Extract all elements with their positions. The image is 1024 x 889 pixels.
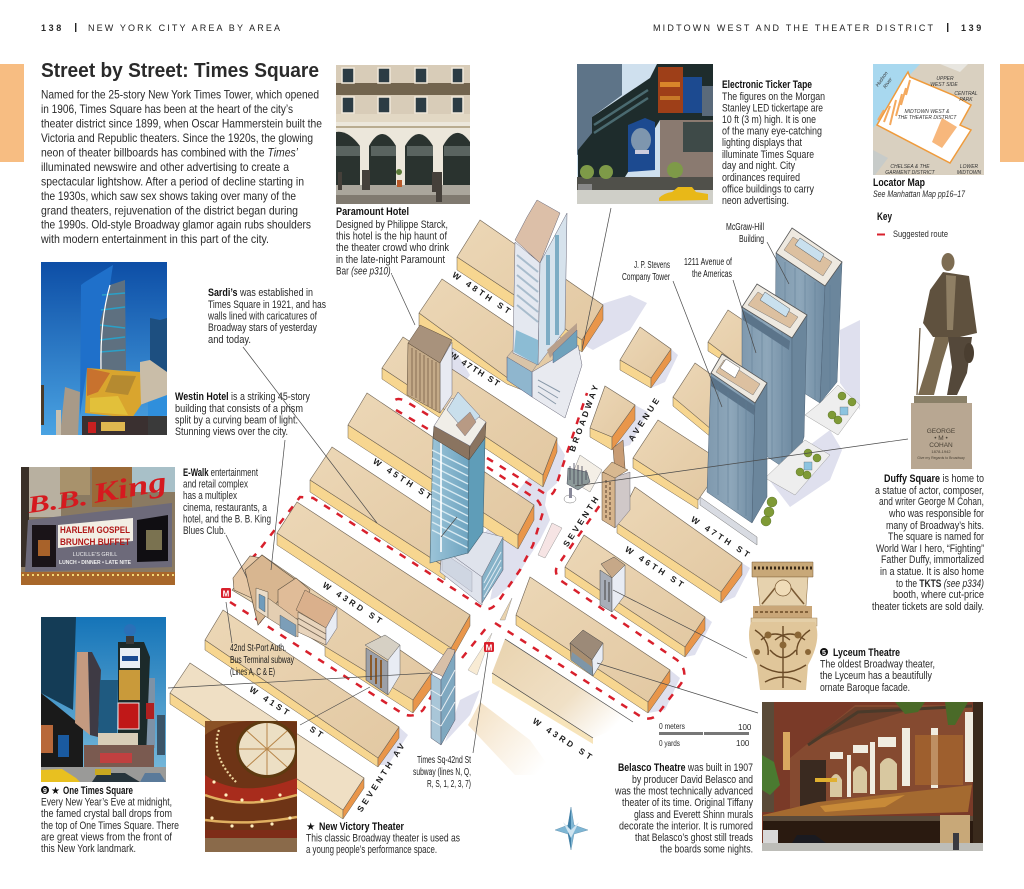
caption: Lyceum Theatre	[820, 647, 935, 694]
building labels: 1211 Avenue of	[684, 257, 732, 268]
caption: Duffy Square: to the TKTS (see p334)	[896, 578, 984, 590]
intro text block: Victoria and Republic theaters. Since the 1920s, the glowing	[41, 131, 313, 145]
caption: New Victory Theater: a young people’s performance space.	[306, 844, 437, 856]
block: W 45th lower	[516, 577, 670, 713]
illustrated street map	[168, 200, 908, 850]
block: Broadway small	[590, 386, 635, 450]
caption: Electronic Ticker Tape	[722, 79, 825, 207]
caption: Paramount Hotel: this hotel is the hip haunt of	[336, 230, 447, 242]
caption: Paramount Hotel	[336, 206, 450, 278]
caption: Electronic Ticker Tape: ordinances required	[722, 172, 800, 184]
building labels: Company Tower	[622, 272, 670, 283]
building labels: Building	[739, 234, 764, 245]
photo: New Victory Theater	[205, 721, 297, 852]
caption: Westin Hotel: building that consists of a prism	[175, 403, 303, 415]
statue figure	[917, 253, 977, 395]
caption: Duffy Square: who was responsible for	[888, 508, 984, 520]
caption: Belasco Theatre: was the most technically advanced	[614, 786, 753, 798]
locator map: CHELSEA & THE	[890, 164, 930, 170]
compass rose	[555, 807, 588, 850]
building labels: 42nd St-Port Auth.	[230, 643, 286, 654]
street labels: W 46TH ST	[623, 544, 688, 591]
locator map: PARK	[959, 97, 973, 103]
locator map: THE THEATER DISTRICT	[898, 115, 957, 121]
suggested route dashes	[230, 393, 684, 719]
street labels: W 47TH ST	[689, 514, 754, 561]
caption: Duffy Square: a statue of actor, composer,	[875, 485, 984, 497]
key legend	[877, 211, 948, 239]
photo: B.B. King marquee: HARLEM GOSPEL	[60, 525, 130, 536]
caption: Electronic Ticker Tape: office buildings to carry	[722, 184, 815, 196]
photo: B.B. King marquee: BRUNCH BUFFET	[60, 537, 130, 548]
photo: B.B. King marquee: LUNCH • DINNER • LATE NITE	[59, 560, 131, 566]
block: W 41st-42nd	[205, 610, 399, 767]
McGraw-Hill plaza and trees	[805, 385, 860, 435]
caption: Sardi's: Broadway stars of yesterday	[208, 322, 318, 334]
scale bar	[659, 722, 752, 748]
intro text block: neon of theater billboards has combined with the Times’	[41, 146, 298, 160]
caption: Electronic Ticker Tape: neon advertising.	[722, 195, 789, 207]
1211 plaza and trees	[765, 440, 830, 495]
intro text block: with modern entertainment in this part of the city.	[40, 232, 269, 246]
street labels: W 43RD ST	[321, 580, 386, 627]
caption: Electronic Ticker Tape: Electronic Ticker Tape	[722, 79, 812, 91]
caption: E-Walk: cinema, restaurants, a	[183, 502, 267, 514]
block: W 42nd-43rd	[232, 555, 432, 713]
locator map: UPPER	[936, 76, 954, 82]
subway icon: Times Sq	[484, 642, 494, 652]
block: W 46th St	[565, 535, 705, 657]
building labels: subway (lines N, Q,	[413, 767, 471, 778]
caption: Duffy Square: World War I hero, “Fighting”	[876, 543, 984, 555]
block: W 46th-47th	[382, 337, 557, 487]
caption: Belasco Theatre: that Belasco’s ghost still treads	[635, 832, 753, 844]
block: W 44th-45th	[310, 447, 480, 580]
caption: Sardi's: Times Square in 1921, and has	[208, 299, 326, 311]
caption: Belasco Theatre: theater of its time. Original Tiffany	[622, 797, 754, 809]
caption: Sardi's: and today.	[208, 334, 251, 346]
caption: Westin Hotel: split by a curving beam of light.	[175, 414, 298, 426]
right thumb tab	[1000, 64, 1024, 162]
Morgan Stanley tower	[507, 200, 582, 418]
block: Avenue small	[620, 327, 671, 388]
block: W 43rd lower fading	[492, 639, 633, 744]
caption: One Times Square: this New York landmark.	[41, 843, 136, 855]
block: W 48th St north	[457, 220, 603, 352]
caption: One Times Square: the famed crystal ball drops from	[41, 808, 172, 820]
caption: Duffy Square	[872, 473, 984, 613]
caption: Lyceum Theatre: 5	[822, 650, 826, 657]
1211 Avenue of the Americas tower	[742, 284, 807, 473]
Duffy Square TKTS booth	[564, 455, 602, 503]
Duffy Square tall building	[602, 440, 630, 528]
caption: Belasco Theatre	[614, 762, 754, 856]
locator map caption: See Manhattan Map pp16–17	[873, 189, 966, 200]
caption: Westin Hotel: Westin Hotel is a striking 45-story	[175, 391, 311, 403]
street labels: W 45TH ST	[371, 456, 436, 503]
caption: One Times Square: Every New Year’s Eve at midnight,	[41, 796, 172, 808]
caption: Westin Hotel: Stunning views over the city.	[175, 426, 288, 438]
block: lower fading	[468, 702, 555, 775]
caption: Electronic Ticker Tape: The figures on the Morgan	[722, 91, 825, 103]
traffic islands	[468, 523, 562, 675]
photo: Lyceum Theatre	[762, 702, 983, 851]
caption: Paramount Hotel: Designed by Philippe Starck,	[336, 219, 448, 231]
street labels: ST	[308, 724, 327, 741]
subway icon: Times Sq: M	[486, 643, 493, 652]
caption: Belasco Theatre: glass and Everett Shinn murals	[634, 809, 753, 821]
building labels: (Lines A, C & E)	[230, 667, 275, 678]
caption: Belasco Theatre: Belasco Theatre was built in 1907	[618, 762, 753, 774]
street labels	[248, 270, 754, 814]
caption: Electronic Ticker Tape: lighting displays that	[722, 137, 802, 149]
scale bar: 100	[738, 723, 752, 732]
Lyceum Theatre building	[600, 557, 625, 612]
photo: Westin Hotel	[41, 262, 167, 435]
caption: Duffy Square: and writer George M Cohan,	[879, 496, 984, 508]
caption: New Victory Theater	[306, 821, 460, 856]
street labels: SEVENTH AV	[355, 739, 408, 814]
caption: Duffy Square: Father Duffy, immortalized	[881, 554, 984, 566]
New Victory Theater building	[365, 635, 400, 695]
caption: Westin Hotel	[175, 391, 311, 438]
caption: Lyceum Theatre: The oldest Broadway theater,	[820, 658, 935, 670]
subway icon: 42nd St: M	[223, 589, 230, 598]
caption: Lyceum Theatre: Lyceum Theatre	[833, 647, 900, 659]
caption: Duffy Square: theater tickets are sold daily.	[872, 601, 984, 613]
intro text block: in 1906, Times Square has been at the heart of the city’s	[41, 102, 293, 116]
photo: Paramount Hotel	[336, 65, 470, 204]
caption: One Times Square	[41, 785, 179, 855]
scale bar: 0 yards	[659, 739, 680, 748]
caption: One Times Square: One Times Square	[63, 785, 133, 797]
block: W 43rd-44th	[277, 502, 470, 660]
locator map caption: Locator Map	[873, 177, 925, 189]
street labels: W 41ST	[248, 684, 294, 719]
caption: Duffy Square: many of Broadway’s hits.	[886, 520, 984, 532]
caption: Electronic Ticker Tape: illuminate Times Square	[722, 149, 814, 161]
locator map: GARMENT DISTRICT	[885, 170, 936, 176]
subway icon: 42nd St	[221, 588, 231, 598]
caption: Belasco Theatre: the boards some nights.	[660, 844, 753, 856]
photo: Electronic Ticker Tape	[577, 64, 713, 204]
running header right: MIDTOWN WEST AND THE THEATER DISTRICT	[653, 23, 936, 33]
caption: Paramount Hotel: the theater crowd who drink	[336, 242, 450, 254]
caption: One Times Square: ★	[51, 786, 60, 797]
caption: E-Walk: and retail complex	[183, 478, 249, 490]
caption: New Victory Theater: ★	[306, 821, 315, 833]
building labels: Times Sq-42nd St	[417, 755, 471, 766]
block: W 45th-46th	[348, 393, 534, 549]
building labels: R, S, 1, 2, 3, 7)	[427, 779, 471, 790]
lavender building shadows	[378, 295, 860, 765]
block: W 47th-48th	[419, 279, 565, 405]
caption: One Times Square: 9	[43, 788, 47, 795]
locator map: LOWER	[960, 164, 979, 170]
photo: B.B. King marquee: King	[90, 467, 169, 510]
caption: New Victory Theater: New Victory Theater	[319, 821, 404, 833]
One Times Square tower	[431, 648, 455, 745]
caption: Duffy Square: in a statue. It is also home	[880, 566, 984, 578]
statue of George M Cohan	[911, 253, 977, 469]
caption: Electronic Ticker Tape: Stanley LED tickertape are	[722, 103, 823, 115]
intro text block: spectacular lightshow. After a period of decline starting in	[41, 174, 304, 188]
illustration: Lyceum column capital	[749, 562, 817, 690]
caption: E-Walk: Blues Club.	[183, 525, 226, 537]
leader lines	[168, 208, 908, 753]
photo: B.B. King marquee: LUCILLE’S GRILL	[73, 552, 117, 558]
caption: E-Walk: hotel, and the B. B. King	[183, 514, 271, 526]
scale bar: 100	[736, 739, 750, 748]
building labels: Bus Terminal subway	[230, 655, 294, 666]
block: behind 1211 tower	[708, 310, 780, 375]
caption: One Times Square: are great views from the front of	[41, 832, 172, 844]
building labels: J. P. Stevens	[634, 260, 670, 271]
caption: Duffy Square: The square is named for	[888, 531, 984, 543]
J. P. Stevens tower	[700, 354, 767, 545]
caption: Electronic Ticker Tape: day and night. City	[722, 160, 796, 172]
street labels: W 43RD ST	[531, 716, 596, 763]
photo: B.B. King marquee: B.B.	[25, 485, 89, 519]
caption: Paramount Hotel: Bar (see p310).	[336, 266, 393, 278]
running header left: NEW YORK CITY AREA BY AREA	[88, 23, 283, 33]
locator map caption	[873, 177, 966, 200]
caption: E-Walk: E-Walk entertainment	[183, 467, 258, 479]
caption: Electronic Ticker Tape: of the many eye-catching	[722, 126, 822, 138]
E-Walk buildings	[233, 555, 337, 645]
caption: Electronic Ticker Tape: 10 ft (3 m) high. It is one	[722, 114, 816, 126]
block: W 47th St	[617, 487, 742, 603]
caption: Duffy Square: booth, where cut-price	[893, 589, 984, 601]
caption: Lyceum Theatre: the Lyceum has a beautifully	[820, 670, 933, 682]
locator map: River	[882, 77, 894, 90]
intro text block: Named for the 25-story New York Times Tower, which opened	[41, 88, 319, 102]
caption: E-Walk: has a multiplex	[183, 490, 238, 502]
caption: Sardi's: walls lined with caricatures of	[207, 310, 317, 322]
statue pedestal: COHAN	[929, 442, 953, 449]
Belasco Theatre building	[570, 630, 603, 676]
key legend: Suggested route	[893, 229, 948, 239]
photo: One Times Square	[41, 617, 166, 782]
running header left: 138	[41, 23, 64, 33]
caption: New Victory Theater: This classic Broadway theater is used as	[306, 832, 460, 844]
title: Street by Street: Times Square	[41, 59, 319, 82]
intro text block: grand theaters, rejuvenation of the district began during	[41, 203, 298, 217]
locator map: WEST SIDE	[930, 82, 958, 88]
Westin Hotel tower	[430, 392, 503, 605]
Stevens trees	[761, 497, 777, 526]
locator map: Hudson	[875, 70, 890, 88]
caption: E-Walk	[183, 467, 271, 537]
statue pedestal: GEORGE	[927, 428, 956, 435]
locator map	[873, 64, 984, 176]
locator map: CENTRAL	[954, 91, 978, 97]
caption: Duffy Square: Duffy Square is home to	[884, 473, 984, 485]
locator map: MIDTOWN WEST &	[905, 109, 950, 115]
intro text block	[40, 88, 322, 246]
street labels: AVENUE	[626, 394, 663, 443]
statue pedestal: Give my Regards to Broadway	[917, 456, 965, 460]
intro text block: illuminated newswire and other advertising to create a	[41, 160, 289, 174]
block: Seventh and 47th upper	[633, 420, 712, 509]
statue pedestal: • M •	[934, 435, 949, 442]
caption: Sardi's	[207, 287, 326, 346]
caption: Belasco Theatre: decorate the interior. It is rumored	[619, 820, 753, 832]
intro text block: the 1990s. Old-style Broadway glamor again rubs shoulders	[41, 218, 311, 232]
caption: One Times Square: the top of One Times Square. There	[41, 820, 179, 832]
block: W 41st south	[170, 663, 364, 819]
street labels: W 48TH ST	[451, 270, 515, 317]
statue pedestal	[911, 396, 972, 469]
street labels: SEVENTH	[561, 492, 602, 548]
Paramount Hotel building	[407, 325, 452, 413]
building labels: McGraw-Hill	[726, 222, 764, 233]
building labels	[230, 222, 764, 790]
running header right: 139	[961, 23, 984, 33]
key legend: Key	[877, 211, 892, 223]
statue pedestal: 1878-1942	[931, 449, 951, 454]
street labels: W 47TH ST	[448, 350, 503, 389]
locator map: MIDTOWN	[957, 170, 982, 176]
caption: Paramount Hotel: in the late-night Paramount	[336, 254, 445, 266]
McGraw-Hill tower	[775, 228, 842, 403]
city blocks	[170, 220, 780, 819]
scale bar: 0 meters	[659, 722, 685, 731]
caption: Paramount Hotel: Paramount Hotel	[336, 206, 409, 218]
street labels: BROADWAY	[567, 381, 601, 453]
block: behind Stevens tower	[673, 363, 740, 438]
intro text block: theater district since 1899, when Oscar Hammerstein built the	[41, 117, 322, 131]
intro text block: the 1930s, which saw sex shows taking over many of the	[41, 189, 296, 203]
building labels: the Americas	[692, 269, 732, 280]
caption: Lyceum Theatre: ornate Baroque facade.	[820, 682, 910, 694]
photo: B.B. King marquee	[21, 467, 175, 585]
left thumb tab	[0, 64, 24, 162]
caption: Sardi's: Sardi’s was established in	[208, 287, 313, 299]
caption: Belasco Theatre: by producer David Belasco and	[632, 774, 753, 786]
